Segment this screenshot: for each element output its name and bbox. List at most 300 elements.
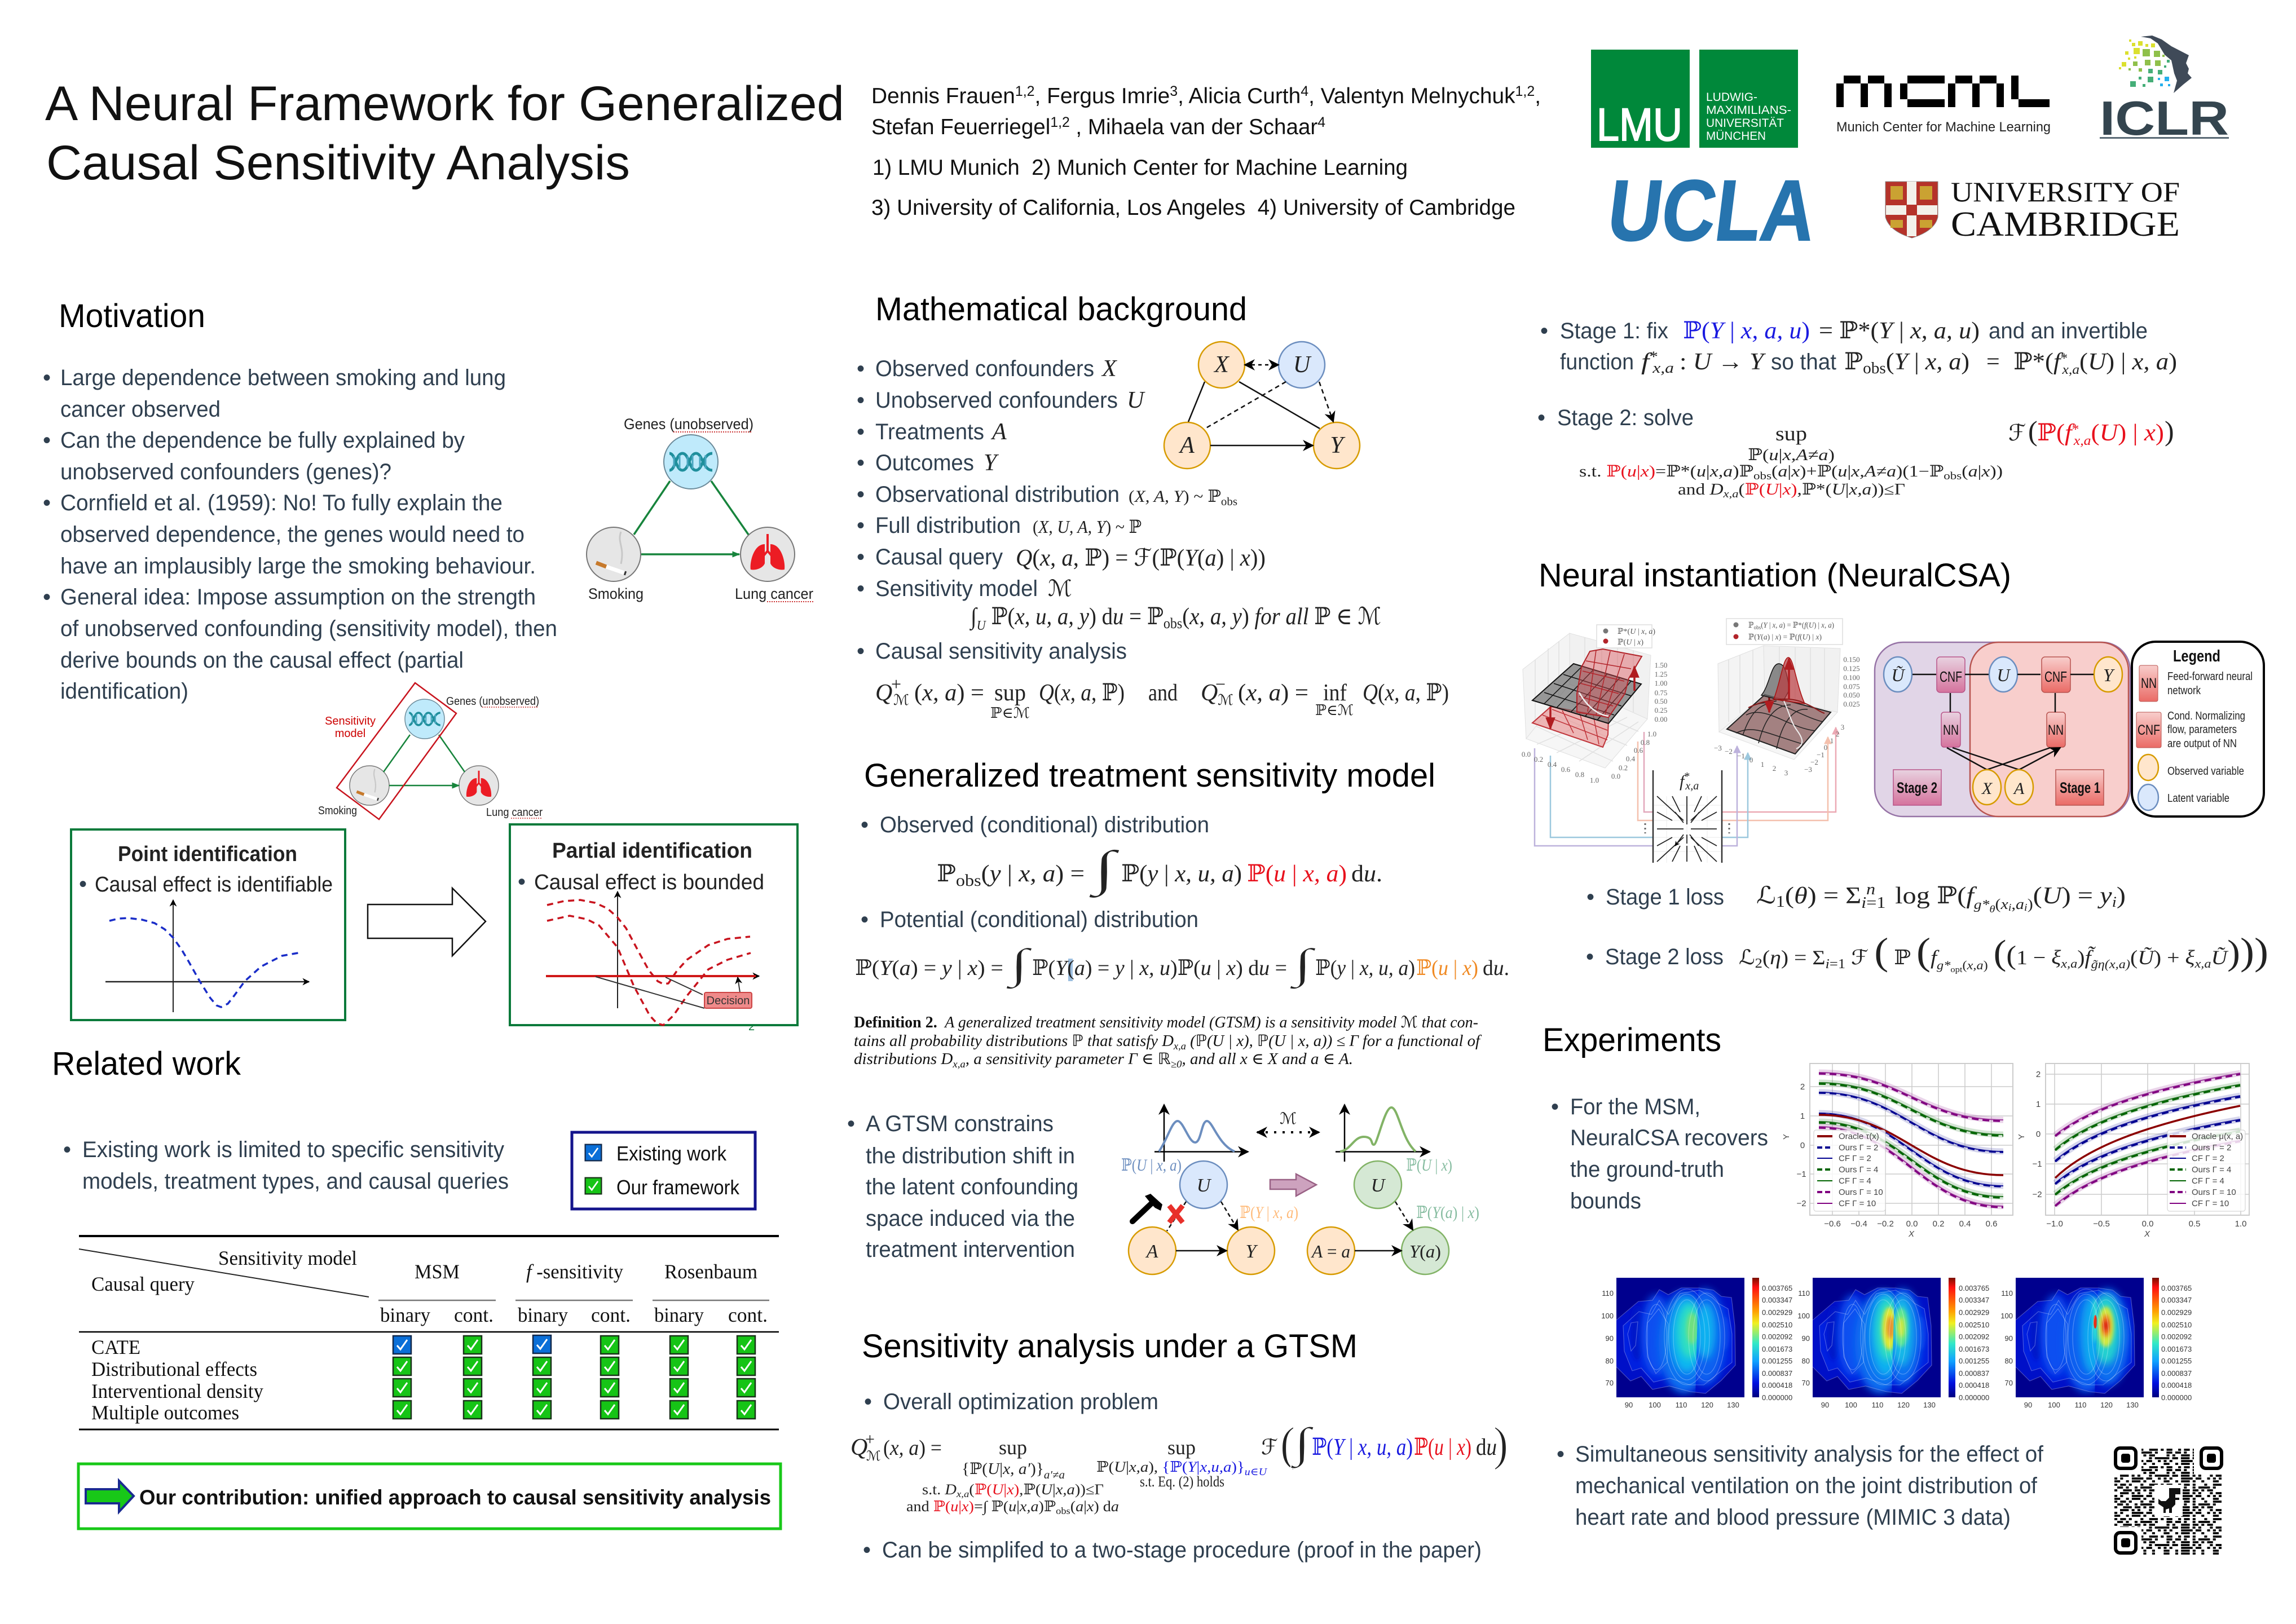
formula: causal sensitivity bounds: sup: [994, 680, 1026, 706]
definitions list: •: [857, 639, 865, 664]
sensitivity model diagram: model: [335, 727, 365, 740]
line chart: CATE bounds: Ours Γ = 4: [1839, 1165, 1878, 1175]
heading: related work: Related work: [52, 1045, 241, 1082]
legend: architecture: network: [2167, 685, 2201, 697]
heatmap 3: 90: [2024, 1401, 2032, 1409]
definitions list: Treatments: [875, 420, 984, 444]
comparison table: cont.: [728, 1304, 768, 1326]
3D plot: latent distribution: 1.0: [1590, 776, 1599, 784]
definitions list: •: [857, 545, 865, 570]
label: stage 2: Stage 2: [1897, 779, 1937, 796]
definitions list: obs: [1221, 496, 1237, 508]
causal diagram: genes, smoking, lung cancer: Genes (unobserved): [624, 416, 753, 433]
MSM bullet: bounds: [1570, 1189, 1641, 1213]
graph before intervention: [1121, 1156, 1298, 1274]
heading: motivation: Motivation: [59, 298, 205, 334]
stage 2 statement: ): [2165, 415, 2174, 447]
line chart: CATE bounds: 2: [1800, 1082, 1805, 1092]
definition 2 text block: (ℙ(U | x), ℙ(U | x, a)) ≤ Γ for a functional of: [1186, 1032, 1482, 1050]
stage 1 loss: i: [1861, 894, 1866, 912]
panel: experiments: [1543, 1022, 2249, 1556]
motivation bullets: have an implausibly large the smoking behaviour.: [60, 554, 536, 579]
GTSM explanation bullet: •: [847, 1111, 855, 1136]
stage 1 statement: ℙ*(f: [2013, 349, 2060, 375]
line chart: CATE bounds: 0: [1800, 1141, 1805, 1150]
definitions list: ℙ(: [986, 604, 1015, 630]
heatmap 3: 80: [2005, 1357, 2013, 1365]
panel: motivation: [43, 298, 813, 1033]
logo: LMU: LMU: [1597, 99, 1682, 151]
line chart: density bounds: −2: [2032, 1190, 2042, 1199]
heatmap 3: 0.003765: [2161, 1284, 2192, 1292]
flow field: transformation f*x,a: x,a: [1685, 780, 1699, 792]
comparison table: Causal query: [91, 1273, 195, 1295]
formula: observed distribution: y | x, a) =: [990, 861, 1082, 887]
heatmap 2: 0.001255: [1959, 1357, 1989, 1365]
motivation bullets: cancer observed: [60, 397, 221, 422]
node: NN stage 1: [2047, 712, 2065, 747]
stage 2 loss: ): [2077, 946, 2085, 969]
heatmap 3: 0.002929: [2161, 1308, 2192, 1317]
3D plot: outcome distribution: 1: [1761, 760, 1764, 769]
3D plot: outcome distribution: −2: [1725, 747, 1733, 756]
stage 1 loss: i: [2008, 902, 2012, 913]
line chart: density bounds: 0.0: [2142, 1219, 2153, 1229]
panel: mathematical background: [857, 291, 1449, 721]
GTSM explanation bullet: [847, 1111, 1078, 1262]
stage 1 statement: Stage 1: fix: [1560, 319, 1668, 343]
definitions list: •: [857, 513, 865, 538]
logo: MCML: [1836, 76, 2051, 135]
authors and affiliations: , Alicia Curth: [1178, 84, 1301, 108]
potential distribution bullet: •: [861, 907, 869, 932]
node: X: X: [1981, 779, 1993, 798]
logo: LMU: LUDWIG-: [1706, 91, 1757, 104]
line chart: CATE bounds: Y: [1782, 1134, 1791, 1140]
formula: optimization problem: ℱ: [1261, 1436, 1278, 1459]
stage 1 loss: [1587, 881, 2126, 915]
causal diagram: genes, smoking, lung cancer: Smoking: [588, 585, 644, 602]
graph before intervention: U: [1197, 1175, 1212, 1196]
stage 1 statement: so that: [1771, 350, 1836, 374]
two-stage bullet: •: [863, 1538, 871, 1563]
stage 2 loss: g̃η(x,a): [2091, 957, 2130, 971]
heatmap 1: 0.002092: [1762, 1332, 1792, 1341]
formula: optimization problem: du: [1476, 1435, 1497, 1460]
definitions list: Y: [984, 450, 999, 476]
3D plot: outcome distribution: −1: [1817, 751, 1825, 759]
definitions list: •: [857, 482, 865, 507]
formula: observed distribution: ℙ: [937, 861, 955, 887]
stage 2 loss: =1: [1830, 957, 1845, 972]
callout: our contribution: [78, 1464, 781, 1529]
stage 1 loss: ): [2117, 883, 2126, 909]
authors and affiliations: 1,2: [1015, 83, 1035, 99]
stage 1 loss: Stage 1 loss: [1606, 885, 1724, 910]
flow field: transformation f*x,a: [1645, 770, 1729, 863]
formula: optimization problem: s.t. D: [922, 1481, 955, 1498]
line chart: CATE bounds: Oracle τ(x): [1839, 1132, 1879, 1141]
3D plot: outcome distribution: (: [1761, 621, 1764, 630]
stage 2 statement: sup: [1775, 422, 1807, 445]
line chart: CATE bounds: X: [1908, 1229, 1915, 1239]
stage 1 loss: θ: [1989, 903, 1995, 915]
stage 1 statement: *: [2060, 351, 2068, 366]
logo: LMU: MAXIMILIANS-: [1706, 104, 1791, 117]
formula: optimization problem: x,a: [956, 1489, 969, 1499]
authors and affiliations: ,: [1535, 84, 1541, 108]
3D plot: outcome distribution: 0.075: [1843, 682, 1860, 691]
line chart: CATE bounds: 0.0: [1906, 1219, 1918, 1229]
3D plot: outcome distribution: 3: [1784, 769, 1788, 777]
node: CNF stage 1: CNF: [2044, 668, 2067, 685]
related work bullet: models, treatment types, and causal queries: [82, 1169, 509, 1194]
formula: optimization problem: ℙ(U|x,a), {ℙ(Y|x,u,a)}: [1096, 1459, 1244, 1475]
causal diagram: genes, smoking, lung cancer: Lung cancer: [735, 585, 813, 602]
formula: causal sensitivity bounds: Q: [875, 680, 892, 706]
stage 2 statement: a|x)+ℙ( u|x,A≠a )(1−ℙ: [1778, 463, 1936, 480]
node: NN stage 1: NN: [2048, 722, 2064, 738]
heatmap 3: 110: [2075, 1401, 2086, 1409]
stage 1 statement: Y | x, a): [1894, 349, 1969, 375]
stage 1 loss: ,: [2012, 896, 2016, 912]
formula: observed distribution: du.: [1351, 861, 1382, 887]
heatmap 3: 0.001673: [2161, 1345, 2192, 1353]
3D plot: outcome distribution: Y | x, a) = ℙ*(f(U) | x, a): [1764, 621, 1834, 630]
3D plot: outcome distribution: −3: [1714, 744, 1722, 752]
heatmap 1: 0.003347: [1762, 1296, 1792, 1304]
formula: causal sensitivity bounds: Q(x, a, ℙ): [1363, 680, 1449, 706]
line chart: CATE bounds: Ours Γ = 10: [1839, 1188, 1883, 1197]
authors and affiliations: 4: [1301, 83, 1308, 99]
arrows in architecture: [1912, 674, 2094, 770]
GTSM explanation bullet: treatment intervention: [866, 1237, 1075, 1262]
formula: potential distribution: ℙ(Y(a) = y | x) =: [855, 956, 1003, 980]
3D plot: outcome distribution: −1: [1737, 752, 1745, 760]
node: Y: Y: [2103, 665, 2115, 685]
heatmap 3: 0.000000: [2161, 1393, 2192, 1402]
logo: MCML: Munich Center for Machine Learning: [1836, 120, 2051, 135]
panel: neural instantiation: [1522, 557, 2268, 974]
stage 2 statement: U) | x): [2100, 420, 2163, 446]
stage 1 statement: x,a: [2061, 363, 2079, 377]
line chart: CATE bounds: −2: [1796, 1199, 1806, 1208]
formula: optimization problem: (: [969, 1481, 975, 1498]
formula: potential distribution: ∫: [1289, 941, 1316, 990]
definitions list: A: [990, 419, 1007, 445]
heatmap 3: 70: [2005, 1379, 2013, 1387]
3D plot: latent distribution: 0.2: [1534, 755, 1543, 764]
formula: optimization problem: ℙ(U|x),ℙ(U|x,a))≤Γ: [975, 1481, 1101, 1498]
node: U: [1989, 657, 2017, 692]
formula: optimization problem: ): [1493, 1418, 1508, 1471]
panel: two-stage procedure: [1537, 318, 2177, 500]
sensitivity model diagram: Genes (unobserved): [446, 695, 539, 708]
heatmap 3: 0.002510: [2161, 1321, 2192, 1329]
formula: causal sensitivity bounds: ℳ: [893, 692, 909, 708]
formula: optimization problem: sup: [999, 1436, 1027, 1459]
stage 2 statement: (: [2028, 415, 2038, 447]
logo: LMU: [1591, 50, 1798, 151]
causal graph: X U A Y: [1164, 342, 1360, 469]
graph after intervention: [1307, 1156, 1479, 1274]
comparison table: binary: [518, 1304, 568, 1326]
definitions list: (X, A, Y) ~ ℙ: [1129, 487, 1219, 506]
stage 1 statement: = ℙ*(Y | x, a, u): [1819, 318, 1980, 344]
line chart: CATE bounds: CF Γ = 2: [1839, 1154, 1871, 1163]
heatmap 2: 90: [1821, 1401, 1829, 1409]
authors and affiliations: 3) University of California, Los Angeles 4) University of Cambridge: [871, 196, 1515, 220]
heatmap 3: 110: [2001, 1289, 2013, 1298]
panel: related work: [52, 1045, 781, 1529]
stage 2 statement: ℙ(U|x),ℙ*( U|x,a))≤Γ: [1745, 481, 1900, 498]
definitions list: X: [1101, 356, 1118, 382]
logo: University of Cambridge: CAMBRIDGE: [1951, 205, 2180, 244]
graph after intervention: ℙ(Y(a) | x): [1416, 1203, 1479, 1222]
stage 1 loss: =1: [1866, 894, 1885, 912]
comparison table: MSM: [415, 1260, 460, 1283]
stage 2 statement: (: [1771, 463, 1778, 480]
graph before intervention: ℙ(U | x, a): [1121, 1156, 1182, 1175]
sensitivity model diagram: Smoking: [318, 805, 357, 817]
formula: causal sensitivity bounds: +: [891, 674, 901, 694]
definition 2 text block: , and all x ∈ X and a ∈ A.: [1182, 1051, 1353, 1068]
3D plot: outcome distribution: −3: [1804, 765, 1812, 774]
stage 2 statement: Stage 2: solve: [1557, 405, 1694, 430]
flow field: transformation f*x,a: f: [1680, 772, 1686, 791]
heatmap 2: 0.003765: [1959, 1284, 1989, 1292]
heatmap 1: 0.002929: [1762, 1308, 1792, 1317]
legend: architecture: CNF: [2138, 722, 2160, 738]
authors and affiliations: , Valentyn Melnychuk: [1308, 84, 1515, 108]
heatmap 1: 110: [1676, 1401, 1687, 1409]
line chart: density bounds: −1.0: [2046, 1219, 2063, 1229]
3D plot: latent distribution: 0.6: [1561, 765, 1571, 774]
stage 2 loss: •: [1586, 945, 1594, 969]
observed distribution bullet: •: [861, 813, 869, 837]
stage 1 loss: θ) = Σ: [1794, 883, 1854, 909]
stage 1 loss: i: [2024, 902, 2028, 913]
sensitivity model diagram: Sensitivity: [325, 715, 376, 727]
motivation bullets: •: [43, 365, 51, 390]
formula: causal sensitivity bounds: ℳ: [1218, 692, 1233, 708]
heatmap 2: 0.000000: [1959, 1393, 1989, 1402]
formula: causal sensitivity bounds: inf: [1323, 680, 1347, 706]
heatmap 1: 100: [1601, 1312, 1614, 1320]
panel: sensitivity analysis under a GTSM: [850, 1328, 1508, 1563]
stage 1 statement: function: [1560, 350, 1634, 374]
line chart: CATE bounds: 0.4: [1959, 1219, 1971, 1229]
definition 2 text block: Definition 2. A generalized treatment sensitivity model (GTSM) is a sensitivity model ℳ that con-: [854, 1014, 1478, 1031]
line chart: density bounds: 0: [2036, 1129, 2041, 1139]
3D plot: latent distribution: 0.0: [1611, 772, 1620, 780]
line chart: density bounds: 1.0: [2235, 1219, 2246, 1229]
3D plot: latent distribution: 0.4: [1626, 754, 1636, 763]
stage 1 statement: and an invertible: [1989, 319, 2148, 343]
comparison table: cont.: [591, 1304, 631, 1326]
GTSM explanation bullet: space induced via the: [866, 1206, 1075, 1231]
line chart: CATE bounds: 1: [1800, 1111, 1805, 1121]
formula: optimization problem: ℙ(u | x): [1414, 1435, 1471, 1460]
definitions list: Full distribution: [875, 513, 1021, 538]
heatmap 2: 100: [1797, 1312, 1810, 1320]
related work bullet: •: [63, 1137, 71, 1162]
legend: architecture: Feed-forward neural: [2167, 670, 2253, 683]
heatmap 1: 110: [1602, 1289, 1614, 1298]
two-stage bullet: Can be simplifed to a two-stage procedure (proof in the paper): [882, 1538, 1482, 1563]
definitions list: •: [857, 576, 865, 601]
partial identification box: Partial identification: [552, 839, 752, 863]
3D plot: outcome distribution: [1714, 619, 1860, 777]
line chart: density bounds: CF Γ = 10: [2192, 1199, 2229, 1208]
heatmap 1: 0.000418: [1762, 1381, 1792, 1389]
3D plot: outcome distribution: ℙ(Y(a) | x) = ℙ(f(U) | x): [1748, 633, 1822, 642]
density plot: observational: [1154, 1105, 1248, 1162]
3D plot: outcome distribution: 0.150: [1843, 655, 1860, 664]
authors and affiliations: 1,2: [1050, 114, 1070, 130]
heatmap 3: 100: [2000, 1312, 2013, 1320]
stage 2 loss: 2: [1755, 956, 1762, 971]
icon: red cross: [1169, 1206, 1183, 1223]
3D plot: latent distribution: 0.2: [1619, 764, 1628, 772]
stage 2 loss: (: [1963, 958, 1967, 972]
node: A: [2005, 770, 2033, 805]
causal graph: X U A Y: A: [1178, 433, 1195, 458]
stage 2 statement: ℱ: [2008, 420, 2026, 445]
3D plot: outcome distribution: 2: [1836, 730, 1839, 738]
authors and affiliations: 4: [1317, 114, 1325, 130]
heatmap 2: 0.002510: [1959, 1321, 1989, 1329]
3D plot: latent distribution: 1.50: [1655, 661, 1667, 669]
GTSM explanation bullet: A GTSM constrains: [866, 1111, 1054, 1136]
partial identification box: Decision: [707, 995, 750, 1007]
line chart: CATE bounds: CF Γ = 10: [1839, 1199, 1876, 1208]
line chart: CATE bounds: −1: [1796, 1170, 1806, 1179]
line chart: CATE bounds: 0.6: [1986, 1219, 1997, 1229]
hollow arrow: point to partial identification: [368, 888, 486, 956]
stage 2 loss: i: [1826, 957, 1830, 972]
3D plot: latent distribution: 0.25: [1655, 706, 1667, 714]
panel: generalized treatment sensitivity model: [847, 757, 1509, 1274]
formula: optimization problem: (x, a) =: [883, 1436, 942, 1460]
formula: optimization problem: ℳ: [866, 1449, 881, 1464]
heatmap 2: 80: [1802, 1357, 1810, 1365]
title: Causal Sensitivity Analysis: [46, 136, 630, 190]
3D plot: latent distribution: 0.0: [1522, 750, 1531, 758]
stage 1 loss: ): [2028, 896, 2033, 912]
line chart: density bounds: 1: [2036, 1100, 2041, 1109]
stage 2 loss: (: [2130, 946, 2138, 969]
formula: causal sensitivity bounds: (x, a) =: [914, 680, 984, 706]
heatmap 3: 0.003347: [2161, 1296, 2192, 1304]
formula: causal sensitivity bounds: ℙ∈ℳ: [990, 705, 1030, 721]
stage 2 statement: •: [1537, 405, 1545, 430]
definitions list: Q(x, a, ℙ) = ℱ(ℙ(Y(a) | x)): [1016, 545, 1266, 571]
node: U: U: [1997, 665, 2011, 685]
formula: optimization problem: [850, 1418, 1508, 1516]
stage 1 statement: x,a: [1652, 360, 1674, 376]
stage 2 statement: (: [1739, 481, 1745, 498]
authors and affiliations: 1) LMU Munich 2) Munich Center for Machine Learning: [872, 156, 1408, 180]
definition 2 text block: distributions D: [854, 1051, 949, 1068]
overall optimization bullet: •: [864, 1389, 872, 1414]
comparison table: CATE: [91, 1336, 140, 1358]
formula: causal sensitivity bounds: and: [1148, 680, 1178, 706]
simultaneous sensitivity bullet: •: [1557, 1442, 1565, 1467]
graph before intervention: A: [1145, 1241, 1158, 1262]
related work bullet: [63, 1137, 509, 1194]
stage 1 loss: U) = y: [2042, 883, 2110, 909]
formula: causal sensitivity bounds: Q(x, a, ℙ): [1039, 680, 1125, 706]
heatmap 1: 100: [1649, 1401, 1661, 1409]
comparison table: Interventional density: [91, 1380, 263, 1402]
definitions list: [857, 356, 1381, 664]
stage 2 statement: a|x)): [1968, 463, 2000, 480]
3D plot: outcome distribution: 0.125: [1843, 664, 1860, 673]
definitions list: x, a, y) for all ℙ ∈ ℳ: [1189, 604, 1387, 630]
node: NN stage 2: [1941, 712, 1960, 747]
graph before intervention: ℙ(Y | x, a): [1240, 1203, 1298, 1222]
label: stage 1: Stage 1: [2060, 779, 2100, 796]
heatmap 2: 110: [1798, 1289, 1810, 1298]
point identification box: Point identification: [118, 842, 297, 866]
formula: potential distribution: du.: [1483, 956, 1509, 980]
MSM bullet: NeuralCSA recovers: [1570, 1126, 1768, 1150]
3D plot: outcome distribution: 0: [1749, 756, 1753, 764]
definitions list: •: [857, 356, 865, 381]
authors and affiliations: [871, 83, 1541, 220]
stage 1 statement: ℙ(Y | x, a, u): [1683, 318, 1810, 344]
heatmap 2: 130: [1923, 1401, 1936, 1409]
3D plot: latent distribution: 1.00: [1655, 679, 1667, 687]
stage 2 statement: ℙ(f: [2037, 420, 2072, 446]
heatmap 3: 0.000418: [2161, 1381, 2192, 1389]
heatmap 2: [1797, 1278, 1989, 1409]
authors and affiliations: 1,2: [1515, 83, 1535, 99]
causal graph: X U A Y: U: [1293, 352, 1312, 378]
stage 1 loss: f: [1966, 883, 1977, 909]
formula: optimization problem: {ℙ(U|x, a′)}: [962, 1460, 1043, 1478]
stage 2 loss: ))): [2227, 930, 2266, 973]
logo: University of Cambridge: [1885, 176, 2180, 244]
legend: architecture: flow, parameters: [2167, 723, 2237, 736]
legend: existing work and our framework: Existing work: [616, 1142, 727, 1165]
heatmap 1: 80: [1606, 1357, 1614, 1365]
motivation bullets: [43, 365, 557, 704]
formula: optimization problem: (: [1280, 1418, 1295, 1471]
3D plot: latent distribution: 0.75: [1655, 689, 1667, 697]
formula: causal sensitivity bounds: [875, 674, 1449, 721]
motivation bullets: identification): [60, 679, 188, 704]
line chart: density bounds: −0.5: [2093, 1219, 2110, 1229]
heatmap 1: [1601, 1278, 1792, 1409]
motivation bullets: Large dependence between smoking and lung: [60, 365, 506, 390]
stage 1 statement: : U → Y: [1680, 349, 1766, 375]
heatmap 1: 0.001673: [1762, 1345, 1792, 1353]
stage 1 loss: (: [1785, 883, 1794, 909]
authors and affiliations: Stefan Feuerriegel: [871, 115, 1052, 139]
definitions list: Outcomes: [875, 451, 974, 475]
graph after intervention: Y(a): [1409, 1241, 1441, 1261]
stage 1 loss: x: [2000, 896, 2008, 912]
density plot: interventional: [1336, 1105, 1430, 1162]
stage 2 statement: x,a: [2073, 434, 2091, 448]
3D plot: latent distribution: 0.4: [1548, 760, 1557, 769]
stage 1 loss: i: [2112, 894, 2117, 910]
definition 2 text block: x,a: [1173, 1040, 1186, 1052]
heatmap 2: 120: [1897, 1401, 1910, 1409]
QR code: [2112, 1445, 2223, 1556]
